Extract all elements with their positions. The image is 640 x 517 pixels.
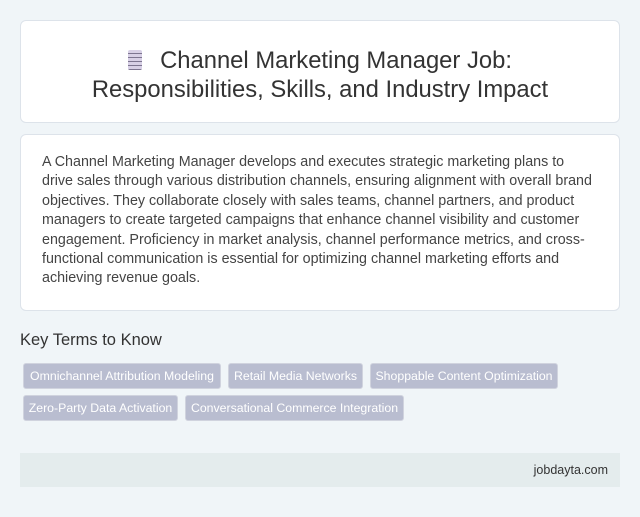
footer [20, 453, 620, 487]
description text [42, 154, 592, 286]
description text: managers to create targeted campaigns that enhance channel visibility and customer [42, 212, 579, 228]
footer text: jobdayta.com [534, 463, 608, 477]
tag [370, 363, 558, 389]
tag: Omnichannel Attribution Modeling [30, 369, 214, 383]
tag: Retail Media Networks [234, 369, 357, 383]
description text: achieving revenue goals. [42, 270, 200, 286]
description text: engagement. Proficiency in market analysis, channel performance metrics, and cross- [42, 232, 585, 248]
description text: drive sales through various distribution channels, ensuring alignment with overall brand [42, 173, 592, 189]
title text: Channel Marketing Manager Job: [160, 47, 512, 74]
description text: objectives. They collaborate closely with sales teams, channel partners, and product [42, 193, 574, 209]
title text [92, 47, 548, 103]
title card [20, 20, 620, 123]
tag: Conversational Commerce Integration [191, 401, 398, 415]
tag: Zero-Party Data Activation [29, 401, 172, 415]
tag [228, 363, 363, 389]
description text: functional communication is essential for optimizing channel marketing efforts and [42, 251, 559, 267]
tag [23, 363, 221, 389]
tag [185, 395, 404, 421]
tag: Shoppable Content Optimization [375, 369, 553, 383]
tag [23, 395, 178, 421]
description text: A Channel Marketing Manager develops and executes strategic marketing plans to [42, 154, 564, 170]
description card [20, 134, 620, 311]
heading: key terms: Key Terms to Know [20, 331, 162, 349]
icon: document [128, 50, 142, 70]
title text: Responsibilities, Skills, and Industry Impact [92, 76, 548, 103]
